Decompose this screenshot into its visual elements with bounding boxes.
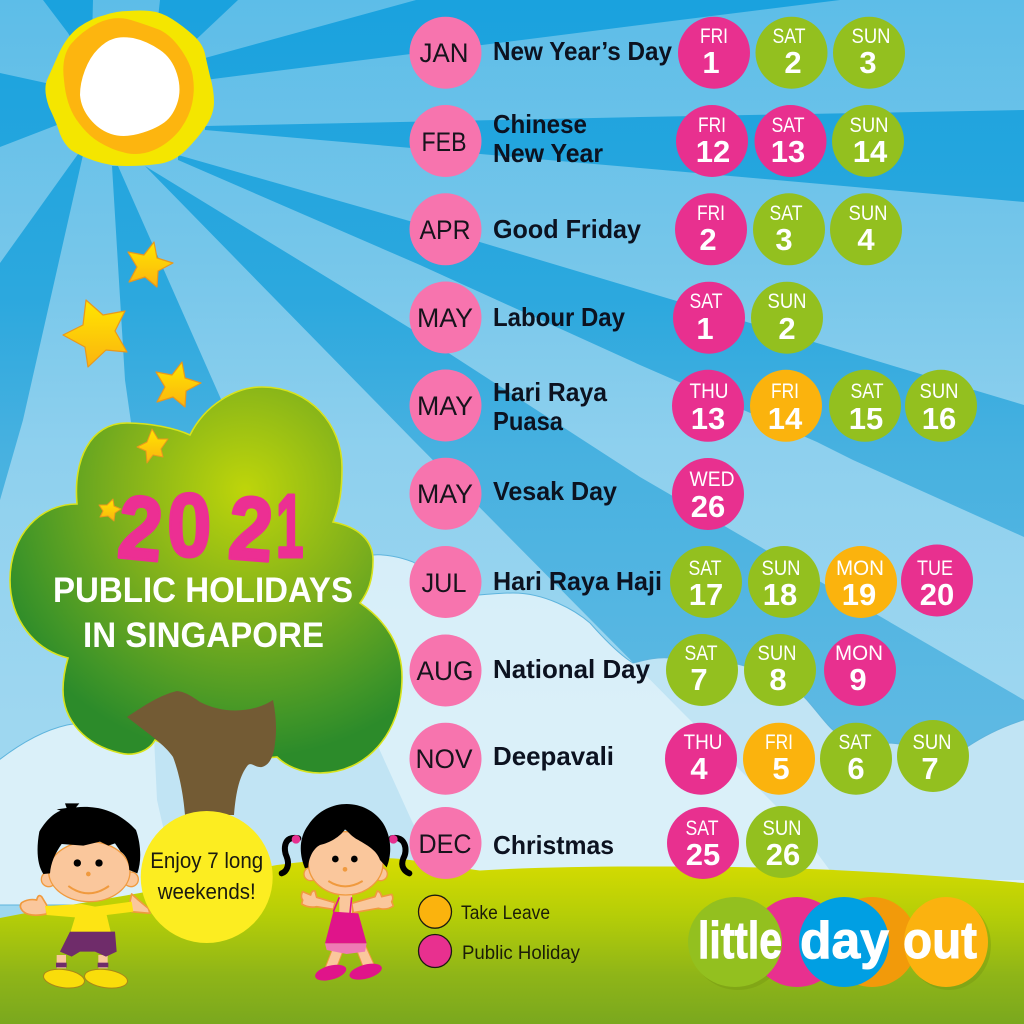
illustration: boy (20, 803, 150, 991)
row: July: SAT (688, 557, 722, 580)
row: July: SUN (762, 557, 800, 580)
row: August: 9 (849, 662, 867, 697)
row: May Vesak Day: WED (690, 468, 734, 491)
row: May Labour Day: 2 (778, 311, 796, 346)
ground: green hills (0, 858, 1024, 1024)
row: July: 19 (842, 577, 876, 612)
icon: large star (63, 300, 127, 367)
row: May Hari Raya Puasa: THU (690, 380, 728, 403)
row: May Vesak Day: 26 (691, 489, 725, 524)
row: April (410, 193, 902, 265)
row: August: AUG (416, 656, 474, 686)
row: February: FRI (698, 114, 726, 137)
row: April: SUN (848, 202, 888, 225)
row: January: JAN (420, 38, 468, 68)
row: January (410, 17, 905, 89)
logo: little day out: little (698, 912, 782, 970)
row: August: 8 (769, 662, 787, 697)
logo: little day out: out (903, 912, 977, 970)
row: July: 20 (920, 577, 954, 612)
clouds (0, 555, 1024, 905)
row: December (410, 806, 818, 879)
tree with title (10, 387, 402, 815)
row: July: MON (836, 557, 884, 580)
row: July: 17 (689, 577, 723, 612)
row: May Vesak Day (410, 458, 744, 530)
row: May Vesak Day: MAY (417, 479, 473, 509)
row: May Hari Raya Puasa: Hari Raya (493, 377, 608, 407)
icon: sun (45, 10, 214, 166)
icon: small star on tree (99, 499, 121, 521)
row: May Hari Raya Puasa (410, 370, 977, 442)
row: February (410, 105, 904, 177)
row: February: Chinese (493, 109, 587, 139)
callout: long weekends (141, 811, 273, 943)
row: January: New Year’s Day (493, 36, 673, 66)
row: November: SAT (838, 731, 872, 754)
row: December: 25 (686, 837, 720, 872)
row: January: 3 (859, 45, 877, 80)
row: December: DEC (418, 829, 472, 859)
row: May Hari Raya Puasa: 16 (922, 401, 956, 436)
row: February: 12 (696, 134, 730, 169)
row: August: 7 (690, 662, 708, 697)
row: April: 2 (699, 222, 717, 257)
logo: little day out: day (800, 912, 889, 970)
row: July (410, 544, 973, 618)
row: February: 14 (853, 134, 888, 169)
row: April: SAT (770, 202, 803, 225)
row: November: 6 (847, 751, 865, 786)
row: August: SUN (758, 642, 796, 665)
title: year: 202 (115, 474, 276, 581)
legend: take leave: Take Leave (461, 903, 550, 924)
row: November: THU (684, 731, 722, 754)
row: May Hari Raya Puasa: SAT (850, 380, 884, 403)
row: May Vesak Day: Vesak Day (493, 476, 618, 506)
legend: public holiday (418, 934, 580, 968)
title: year: 1 (276, 476, 304, 577)
callout: long weekends: Enjoy 7 long (150, 848, 263, 873)
row: November: FRI (765, 731, 793, 754)
row: August (410, 634, 896, 706)
row: January: SUN (852, 25, 890, 48)
row: May Labour Day: MAY (417, 303, 473, 333)
row: August: National Day (493, 654, 651, 684)
title: in singapore: IN SINGAPORE (83, 616, 324, 655)
row: February: FEB (422, 127, 466, 157)
row: July: JUL (422, 568, 466, 598)
illustration: girl (282, 804, 409, 984)
row: May Labour Day: 1 (696, 311, 714, 346)
row: December: 26 (766, 837, 800, 872)
row: May Labour Day: SUN (768, 290, 806, 313)
row: July: 18 (763, 577, 797, 612)
row: December: SAT (686, 817, 719, 840)
row: May Hari Raya Puasa: 15 (849, 401, 883, 436)
row: December: Christmas (493, 830, 614, 860)
row: January: SAT (772, 25, 806, 48)
row: February: SUN (850, 114, 888, 137)
row: November: 7 (921, 751, 939, 786)
row: May Hari Raya Puasa: MAY (417, 391, 473, 421)
row: May Labour Day (410, 282, 823, 354)
legend (418, 895, 580, 968)
row: May Hari Raya Puasa: FRI (771, 380, 799, 403)
title: public holidays: PUBLIC HOLIDAYS (53, 571, 353, 610)
legend: public holiday: Public Holiday (462, 943, 580, 964)
row: January: 2 (784, 45, 802, 80)
row: April: 4 (857, 222, 875, 257)
icon: star (128, 242, 173, 287)
row: November: NOV (416, 744, 472, 774)
row: February: New Year (493, 138, 603, 168)
row: May Hari Raya Puasa: 13 (691, 401, 725, 436)
row: January: 1 (702, 45, 720, 80)
row: July: Hari Raya Haji (493, 566, 662, 596)
row: April: Good Friday (493, 214, 642, 244)
tree crown (10, 387, 402, 773)
row: May Hari Raya Puasa: Puasa (493, 406, 563, 436)
row: November: Deepavali (493, 741, 614, 771)
row: July: TUE (917, 557, 953, 580)
row: November: 4 (690, 751, 708, 786)
row: December: SUN (762, 817, 802, 840)
row: May Hari Raya Puasa: SUN (920, 380, 958, 403)
tree trunk (127, 691, 276, 815)
row: November (410, 720, 969, 795)
row: May Hari Raya Puasa: 14 (768, 401, 803, 436)
row: November: SUN (912, 731, 952, 754)
icon: star on tree (137, 429, 168, 463)
legend: take leave (418, 895, 550, 928)
callout: long weekends: weekends! (157, 879, 256, 904)
row: February: 13 (771, 134, 805, 169)
row: August: MON (835, 642, 883, 665)
row: May Labour Day: Labour Day (493, 302, 625, 332)
row: May Labour Day: SAT (690, 290, 723, 313)
row: November: 5 (772, 751, 790, 786)
row: February: SAT (772, 114, 805, 137)
icon: star (156, 362, 201, 407)
row: April: FRI (697, 202, 725, 225)
row: April: APR (420, 215, 470, 245)
row: April: 3 (775, 222, 793, 257)
row: January: FRI (700, 25, 728, 48)
logo: little day out (688, 897, 991, 990)
row: August: SAT (684, 642, 718, 665)
